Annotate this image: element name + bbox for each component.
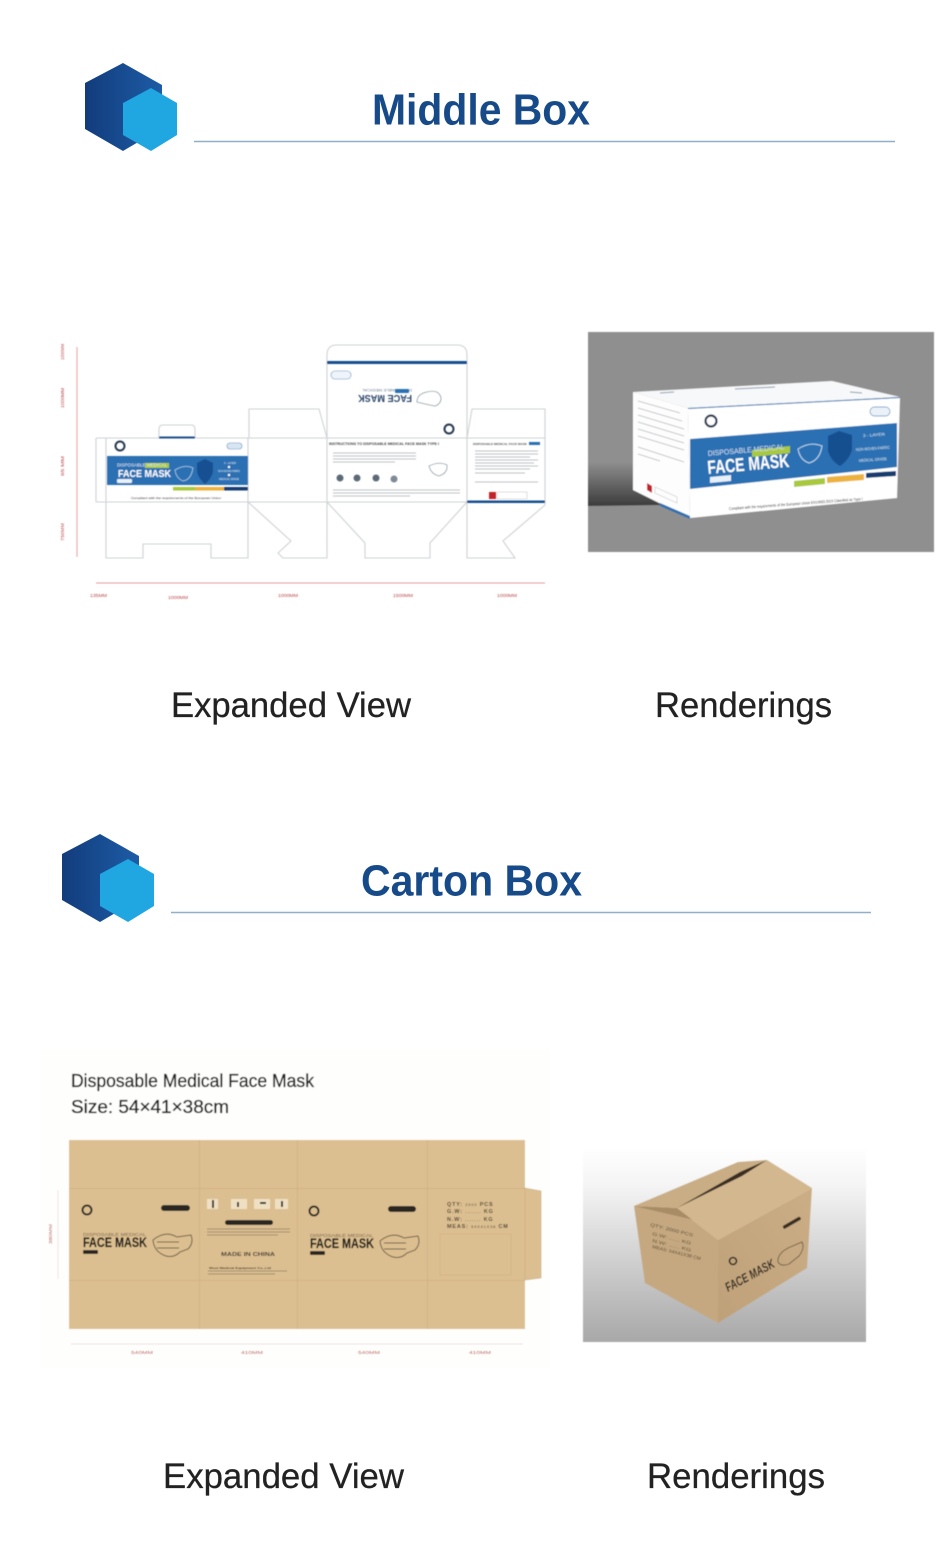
- side tab: [525, 1188, 541, 1280]
- instructions panel artwork: INSTRUCTIONS TO DISPOSABLE MEDICAL FACE MASK TYPE I: [329, 442, 439, 446]
- carton dimension labels: 410MM: [469, 1350, 491, 1355]
- carton left face: [634, 1206, 718, 1323]
- carton dimension labels: 410MM: [241, 1350, 263, 1355]
- backdrop: [588, 332, 934, 552]
- front panel artwork: Compliant with the requirements of the European Union: [131, 496, 221, 500]
- section header: Middle Box: [85, 63, 895, 151]
- front panel artwork: [107, 442, 248, 500]
- dieline outlines: [96, 345, 545, 558]
- dimension labels: 1000MM: [60, 344, 65, 360]
- front panel artwork 1: DISPOSABLE MEDICAL: [83, 1232, 147, 1237]
- colored tags: [794, 471, 896, 487]
- band text and artwork: 3 - LAYER: [863, 431, 885, 438]
- center panel artwork: MADE IN CHINA: [221, 1252, 276, 1258]
- carton dimension lines: [58, 1190, 523, 1344]
- band text and artwork: FACE MASK: [707, 451, 790, 479]
- center panel artwork: Wuxi Medical Equipment Co.,Ltd: [209, 1266, 271, 1270]
- carton dimension labels: 540MM: [131, 1350, 153, 1355]
- front panel artwork: MEDICAL GRADE: [219, 477, 239, 481]
- front panel artwork 2: DISPOSABLE MEDICAL: [310, 1233, 374, 1238]
- diagram: middle box expanded view dieline: [60, 344, 545, 600]
- caption: carton renderings: Renderings: [647, 1456, 825, 1496]
- icon: hexagons: [85, 63, 177, 151]
- carton right face markings: FACE MASK: [722, 1256, 778, 1295]
- top flap artwork, upside down: [331, 371, 454, 434]
- dimension labels: 750MM: [60, 523, 65, 541]
- band text and artwork: [707, 431, 890, 483]
- instructions panel artwork: [329, 442, 460, 496]
- cast shadow: [588, 462, 662, 506]
- icon: hexagons: [62, 834, 154, 922]
- dimension labels: 1000MM: [60, 388, 65, 408]
- box top: [633, 381, 900, 408]
- logo and badge: [706, 407, 890, 426]
- box front: [688, 397, 900, 518]
- caption: carton expanded view: Expanded View: [163, 1456, 404, 1496]
- section header: Carton Box: [62, 834, 871, 922]
- carton top flaps: [634, 1160, 812, 1240]
- top flap band: [327, 361, 467, 364]
- band text and artwork: NON-WOVEN FABRIC: [856, 445, 890, 452]
- caption: middle box renderings: Renderings: [655, 685, 832, 725]
- fold lines: [69, 1140, 525, 1329]
- carton specification text: [71, 1070, 315, 1117]
- shipping marks panel: G.W: ....... KG: [447, 1209, 494, 1215]
- front panel artwork 2: [310, 1206, 419, 1258]
- dimension labels: [60, 344, 517, 600]
- heading: Middle Box: Middle Box: [372, 86, 590, 134]
- front panel artwork 2: FACE MASK: [310, 1236, 374, 1251]
- tab accent: [159, 436, 195, 438]
- dimension labels: 1000MM: [168, 595, 188, 600]
- dimension labels: 1000MM: [497, 593, 517, 598]
- front panel artwork: DISPOSABLE MEDICAL: [117, 462, 167, 468]
- carton specification text: Disposable Medical Face Mask: [71, 1070, 315, 1091]
- band text and artwork: DISPOSABLE MEDICAL: [707, 442, 785, 458]
- diagram: carton box expanded view: [40, 1050, 550, 1368]
- carton right face: [718, 1188, 812, 1323]
- carton left face markings: QTY: 2000 PCS: [650, 1222, 694, 1238]
- footer text: Compliant with the requirements of the European Union EN14683:2019 Classified as Type I: [729, 496, 863, 511]
- box left side: [633, 392, 690, 518]
- side panel details: [638, 401, 684, 503]
- front panel artwork: NON-WOVEN FABRIC: [218, 469, 241, 473]
- backing panel: [40, 1050, 550, 1368]
- carton specification text: Size: 54×41×38cm: [71, 1096, 229, 1117]
- right panel band: [467, 500, 545, 503]
- dimension labels: 1000MM: [278, 593, 298, 598]
- front panel artwork: FACE MASK: [118, 468, 171, 480]
- shipping marks panel: [440, 1202, 511, 1275]
- side panel artwork: [473, 442, 540, 499]
- carton dimension labels: 380MM: [48, 1224, 53, 1244]
- shipping marks panel: QTY: 2000 PCS: [447, 1202, 493, 1208]
- shipping marks panel: N.W: ....... KG: [447, 1217, 493, 1223]
- band text and artwork: MEDICAL GRADE: [859, 456, 887, 463]
- box top text: [660, 387, 862, 393]
- caption: middle box expanded view: Expanded View: [171, 685, 411, 725]
- side panel artwork: DISPOSABLE MEDICAL FACE MASK: [473, 442, 528, 446]
- carton sheet: [69, 1140, 525, 1329]
- studio backdrop: [583, 1147, 866, 1342]
- carton right face markings: [722, 1216, 803, 1295]
- carton left face markings: N.W: ...... KG: [652, 1238, 693, 1253]
- carton dimension labels: [48, 1224, 491, 1355]
- carton left face markings: MEAS: 54X41X38 CM: [652, 1244, 702, 1261]
- front panel artwork 1: [82, 1205, 192, 1256]
- front panel artwork 1: FACE MASK: [83, 1235, 147, 1250]
- dimension labels: 1500MM: [393, 593, 413, 598]
- carton left face markings: [650, 1222, 702, 1261]
- heading: Carton Box: Carton Box: [361, 856, 582, 906]
- carton left face markings: G.W: ...... KG: [652, 1231, 693, 1246]
- image: middle box rendering: [588, 332, 934, 552]
- front blue band: [690, 423, 897, 489]
- top flap artwork, upside down: DISPOSABLE MEDICAL: [362, 388, 412, 392]
- front panel artwork: 3 - LAYER: [224, 461, 237, 465]
- dimension lines: [77, 347, 545, 583]
- top flap artwork, upside down: FACE MASK: [358, 392, 412, 404]
- shipping marks panel: MEAS: 54X41X38 CM: [447, 1224, 509, 1230]
- dimension labels: 65 MM: [60, 456, 65, 476]
- image: carton box rendering: [583, 1147, 866, 1342]
- carton dimension labels: 540MM: [358, 1350, 380, 1355]
- center panel artwork: [207, 1199, 290, 1274]
- dimension labels: 135MM: [90, 593, 107, 598]
